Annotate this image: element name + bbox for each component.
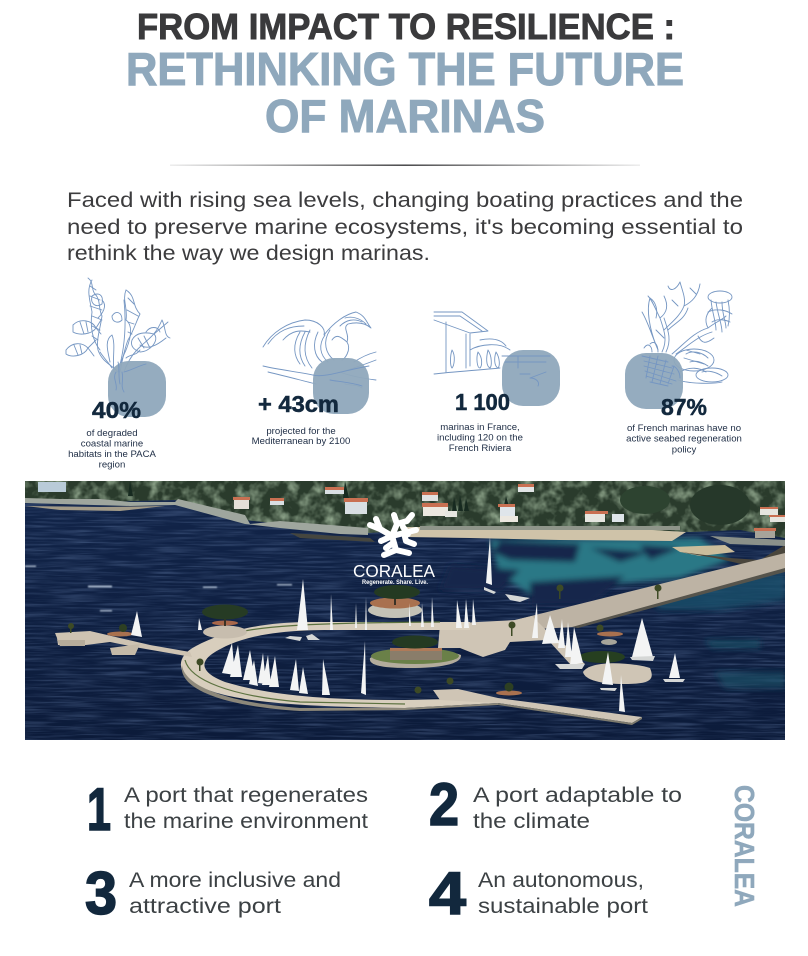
pillar 2: 2 (429, 771, 459, 838)
pillar 4: 4 (429, 860, 467, 927)
seawall and beach (25, 498, 785, 566)
intro paragraph: need to preserve marine ecosystems, it's becoming essential to (67, 216, 743, 239)
intro paragraph: Faced with rising sea levels, changing boating practices and the (67, 189, 743, 212)
pillar 2: A port adaptable to (473, 783, 682, 807)
pillar 1: the marine environment (124, 809, 368, 833)
pillar 3: attractive port (129, 894, 281, 918)
icon: coral and jellyfish sketch (642, 282, 732, 383)
blob (108, 361, 166, 417)
statistic: seabed regeneration (625, 282, 742, 456)
brand name: CORALEA (353, 561, 435, 581)
value: 40% (92, 397, 141, 423)
icon: white coral (370, 515, 416, 555)
pillar 2: the climate (473, 809, 590, 833)
pillar 4: An autonomous, (478, 868, 644, 892)
sea (25, 481, 785, 740)
pillar 4 (429, 860, 648, 927)
value: 87% (661, 394, 707, 420)
caption: region (99, 460, 125, 470)
caption: including 120 on the (437, 432, 523, 444)
intro paragraph (67, 189, 743, 265)
title (126, 6, 684, 142)
intro paragraph: rethink the way we design marinas. (67, 242, 430, 265)
caption: of degraded (86, 428, 138, 439)
caption: marinas in France, (440, 422, 520, 433)
statistic: sea level rise (252, 312, 376, 447)
caption: Mediterranean by 2100 (252, 436, 350, 447)
shore houses (38, 482, 785, 538)
caption: policy (672, 444, 696, 456)
tagline: Regenerate. Share. Live. (362, 579, 428, 586)
caption: coastal marine (81, 438, 143, 450)
blob (313, 358, 369, 414)
left pier (55, 631, 192, 657)
vertical brand word: CORALEA (729, 785, 760, 907)
lower right pier (433, 689, 642, 725)
turquoise shallows (440, 538, 785, 688)
pillar 4: sustainable port (478, 894, 648, 918)
pillar 3 (85, 860, 341, 927)
title: FROM IMPACT TO RESILIENCE : (137, 6, 675, 47)
Coralea logo (353, 515, 435, 586)
sailboats (131, 537, 685, 712)
caption: projected for the (266, 426, 336, 437)
pillar 3: A more inclusive and (129, 868, 341, 892)
wave lines over blob (313, 366, 369, 386)
dense coral texture over blob (642, 356, 680, 386)
title: OF MARINAS (265, 90, 545, 142)
icon: wave sketch (263, 312, 376, 388)
caption: of French marinas have no (627, 423, 741, 434)
statistic: degraded habitats (66, 278, 170, 470)
statistic: marinas in France (434, 312, 560, 454)
pillar 1: A port that regenerates (124, 783, 368, 807)
small trees (68, 584, 662, 694)
kelp roots over blob (115, 362, 146, 392)
shoreline vegetation (25, 481, 785, 541)
aerial image of the Coralea marina (25, 481, 785, 740)
icon: people under shelter sketch (434, 312, 510, 374)
title: RETHINKING THE FUTURE (126, 43, 684, 95)
long right pier (515, 553, 785, 630)
icon: kelp and fish sketch (66, 278, 170, 372)
value: 1 100 (455, 389, 510, 415)
caption: habitats in the PACA (68, 449, 157, 460)
pillar 3: 3 (85, 860, 117, 927)
caption: French Riviera (449, 443, 512, 454)
caption: active seabed regeneration (626, 434, 742, 444)
bench lines over blob (502, 356, 550, 386)
value: + 43cm (258, 391, 339, 417)
blob (502, 350, 560, 406)
pillar 2 (429, 771, 682, 838)
central plaza (438, 616, 585, 664)
circular breakwater (181, 622, 498, 711)
blob (625, 353, 683, 409)
pillar 1 (87, 776, 368, 843)
islands with pine trees (107, 585, 652, 696)
pillar 1: 1 (87, 776, 111, 843)
